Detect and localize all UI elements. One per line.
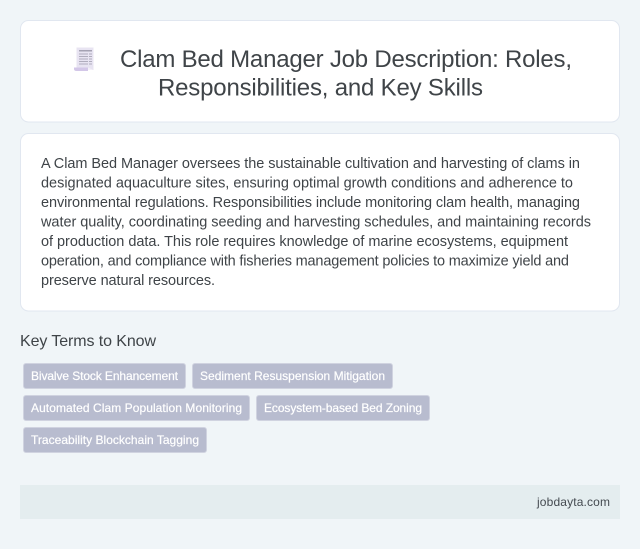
text block: job description: water quality, coordinating seeding and harvesting schedules, and maintaining records (40, 214, 591, 230)
tag: Traceability Blockchain Tagging (24, 428, 206, 452)
text block: job description: of production data. This role requires knowledge of marine ecosystems, equipment (41, 234, 568, 250)
tag: Ecosystem-based Bed Zoning: Ecosystem-based Bed Zoning (264, 401, 422, 415)
footer bar (20, 485, 620, 519)
tag: Bivalve Stock Enhancement: Bivalve Stock Enhancement (31, 369, 179, 383)
tag: Automated Clam Population Monitoring (24, 396, 250, 420)
tag: Bivalve Stock Enhancement (24, 364, 186, 388)
tag: Automated Clam Population Monitoring: Automated Clam Population Monitoring (31, 401, 242, 415)
tags: key terms (24, 364, 430, 452)
tag: Ecosystem-based Bed Zoning (256, 396, 430, 420)
title: Responsibilities, and Key Skills (158, 74, 483, 102)
tag: Sediment Resuspension Mitigation: Sediment Resuspension Mitigation (200, 369, 385, 383)
text block: job description: preserve natural resources. (41, 273, 215, 289)
panel: description card (20, 134, 620, 311)
tag: Traceability Blockchain Tagging: Traceability Blockchain Tagging (31, 433, 199, 447)
title: Clam Bed Manager Job Description: Roles, (120, 46, 572, 73)
text block: job description: operation, and compliance with fisheries management policies to maximize yield and (41, 254, 569, 270)
icon: document scroll (74, 48, 94, 71)
panel: title card (20, 20, 620, 122)
text block: job description: A Clam Bed Manager oversees the sustainable cultivation and harvesting of clams in (41, 156, 580, 172)
tag: Sediment Resuspension Mitigation (192, 364, 392, 388)
title (120, 46, 572, 102)
footer: source: jobdayta.com (536, 495, 610, 509)
text block: job description (40, 156, 591, 289)
heading: key terms: Key Terms to Know (20, 333, 156, 350)
text block: job description: designated aquaculture sites, ensuring optimal growth conditions and adherence to (41, 176, 573, 192)
text block: job description: environmental regulations. Responsibilities include monitoring clam health, managing (41, 195, 580, 211)
